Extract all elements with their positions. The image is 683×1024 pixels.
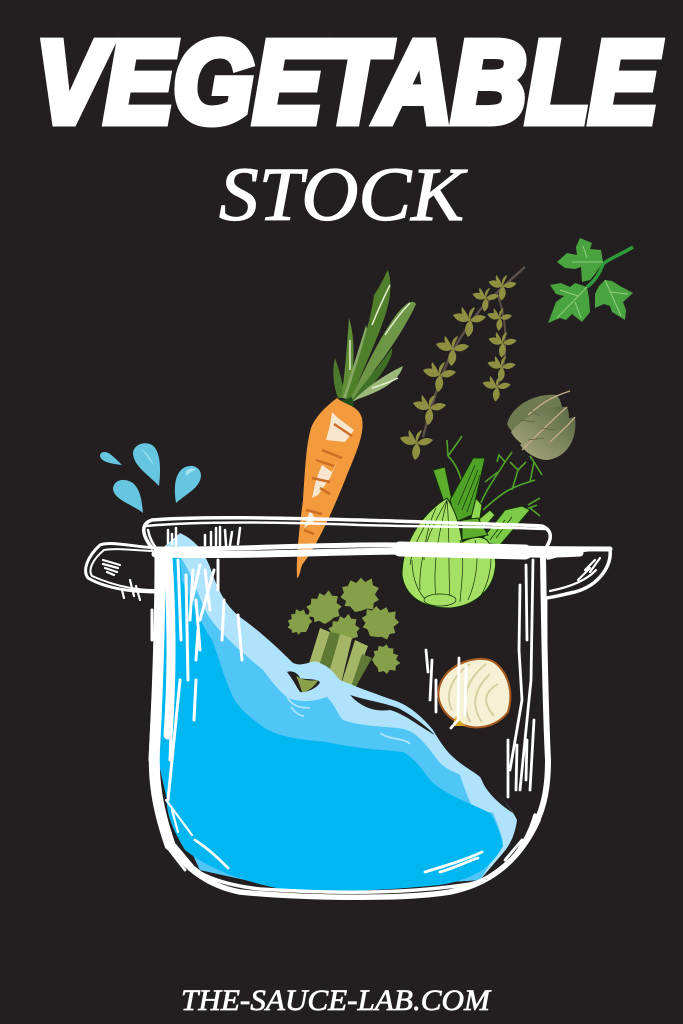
- water ripple highlights: [287, 697, 410, 744]
- fennel fronds: [447, 436, 542, 520]
- water deep left column: [158, 553, 183, 800]
- water deep layer: [167, 580, 503, 892]
- onion overlay strokes: [426, 650, 466, 728]
- carrot greens: [333, 270, 416, 408]
- left handle: [86, 543, 158, 600]
- water in pot: [158, 533, 517, 892]
- carrot root: [297, 398, 363, 578]
- footer url: THE-SAUCE-LAB.COM: [181, 984, 492, 1017]
- icon: parsley: [548, 238, 633, 323]
- icon: carrot: [297, 270, 416, 578]
- water mid layer: [165, 555, 503, 892]
- celery seen through water gap: [287, 671, 320, 692]
- pot rim: [144, 518, 610, 555]
- pot outline sketch: [86, 518, 610, 897]
- subtitle: STOCK: STOCK: [219, 153, 467, 237]
- right wall: [508, 558, 548, 825]
- icon: water splash drops: [100, 443, 201, 513]
- dark gaps in water edge: [350, 695, 513, 813]
- water light outer layer: [160, 533, 517, 892]
- left wall: [150, 555, 242, 845]
- icon: fennel bulb: [402, 436, 542, 608]
- icon: onion half: [438, 659, 510, 727]
- fennel bulb body: [402, 498, 496, 608]
- icon: celery: [282, 572, 406, 692]
- icon: bay leaves: [507, 391, 575, 460]
- pot base: [168, 815, 538, 897]
- right handle: [546, 549, 610, 598]
- fennel stalks: [433, 467, 452, 505]
- icon: thyme sprig: [400, 267, 525, 460]
